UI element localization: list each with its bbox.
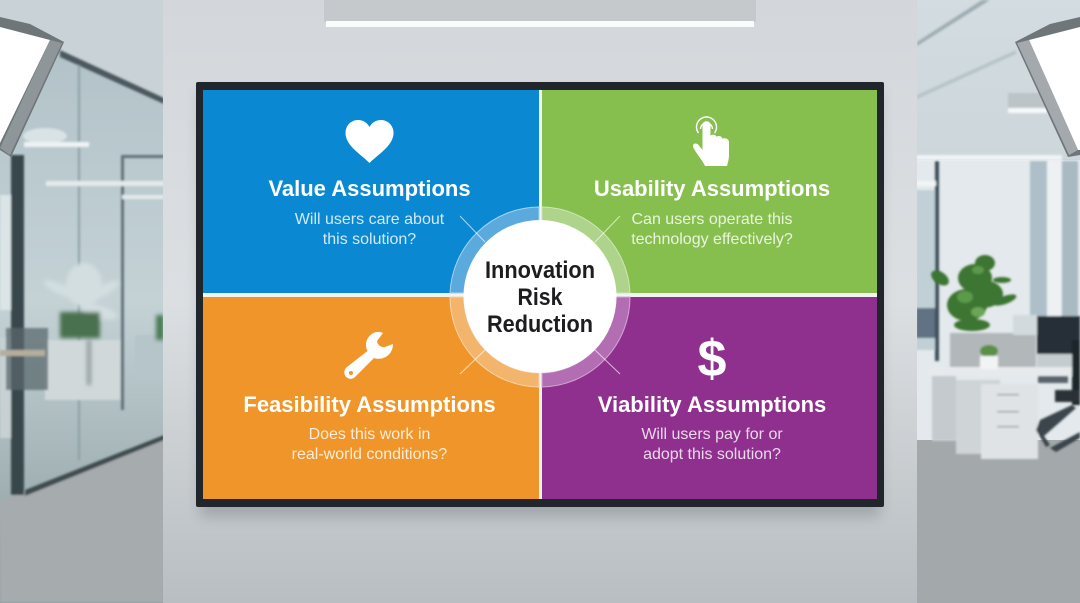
- panel: value assumptions: [203, 90, 539, 293]
- left spotlight: [0, 17, 64, 157]
- panel: viability assumptions: [542, 297, 877, 499]
- icon: wrench: [344, 332, 393, 379]
- center title: Reduction: [487, 311, 593, 338]
- center circle: [464, 220, 616, 373]
- text: viability question: adopt this solution?: [643, 446, 781, 463]
- background: right open office: [916, 0, 1080, 603]
- center ring: [450, 207, 630, 387]
- icon: tapping hand: [693, 117, 729, 166]
- text: feasibility question: real-world conditions?: [292, 446, 447, 463]
- white divider backing: [203, 90, 877, 499]
- center title: Risk: [518, 284, 563, 311]
- plant: [928, 255, 1018, 331]
- display frame: [196, 82, 884, 507]
- screen shadow: [200, 92, 880, 517]
- background: white wall: [163, 0, 917, 603]
- text: value question: this solution?: [323, 231, 416, 248]
- heading: value: Value Assumptions: [268, 176, 471, 201]
- ceiling lamp: [324, 0, 756, 27]
- heading: usability: Usability Assumptions: [594, 176, 830, 201]
- text: usability question: Can users operate this: [632, 211, 792, 228]
- text: usability question: technology effectively?: [631, 231, 793, 248]
- text: feasibility question: Does this work in: [309, 426, 430, 443]
- background: left glass office: [0, 0, 164, 603]
- connector lines: [460, 216, 620, 374]
- text: value question: Will users care about: [295, 211, 444, 228]
- wall display: [196, 82, 884, 507]
- icon: heart: [346, 120, 394, 163]
- center title: Innovation: [485, 257, 595, 284]
- icon: dollar sign: $: [698, 330, 727, 388]
- panel: usability assumptions: [542, 90, 877, 293]
- panel: feasibility assumptions: [203, 297, 539, 499]
- heading: feasibility: Feasibility Assumptions: [243, 392, 496, 417]
- icon hole: [349, 371, 353, 375]
- heading: viability: Viability Assumptions: [598, 392, 826, 417]
- text: viability question: Will users pay for or: [641, 426, 783, 443]
- right spotlight: [1015, 17, 1080, 157]
